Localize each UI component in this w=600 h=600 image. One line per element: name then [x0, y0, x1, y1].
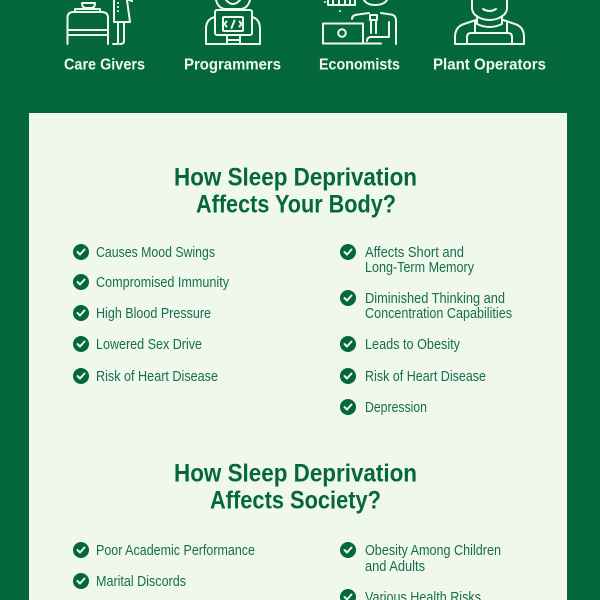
list: body effects, left column: Risk of Heart Disease — [96, 369, 218, 385]
list: body effects, left column — [73, 244, 230, 385]
list: body effects, left column: High Blood Pressure — [96, 306, 211, 322]
list: society effects, left column: Poor Academic Performance — [96, 543, 255, 559]
list: society effects, left column — [73, 542, 255, 590]
list: body effects, left column: Lowered Sex Drive — [96, 337, 202, 353]
section: at-risk professions — [64, 0, 546, 74]
icon: plant operator in overalls — [455, 0, 524, 44]
label: Programmers: Programmers — [184, 56, 281, 74]
heading: affects your body: How Sleep Deprivation — [174, 164, 417, 192]
list: body effects, right column: Long-Term Memory — [365, 260, 475, 276]
panel: sleep deprivation effects — [29, 113, 567, 600]
list: body effects, right column — [340, 244, 512, 416]
list: body effects, right column: Depression — [365, 400, 427, 416]
icon: economist with laptop — [323, 0, 396, 44]
heading: affects your body — [174, 164, 417, 218]
list: body effects, right column: Concentration Capabilities — [365, 306, 512, 322]
list: body effects, right column: Risk of Heart Disease — [365, 369, 486, 385]
heading: affects society — [174, 460, 417, 514]
heading: affects society: Affects Society? — [210, 486, 381, 514]
list: body effects, right column: Leads to Obesity — [365, 337, 461, 353]
heading: affects society: How Sleep Deprivation — [174, 460, 417, 488]
icon: programmer at monitor — [206, 0, 260, 44]
label: Care Givers: Care Givers — [64, 56, 145, 74]
icon: care giver with bed — [68, 0, 132, 44]
list: society effects, left column: Marital Discords — [96, 574, 186, 590]
label: Plant Operators: Plant Operators — [433, 56, 546, 74]
list: body effects, left column: Causes Mood Swings — [96, 245, 215, 261]
list: society effects, right column: Obesity Among Children — [365, 543, 501, 559]
list: society effects, right column: and Adults — [365, 559, 425, 575]
heading: affects your body: Affects Your Body? — [196, 190, 396, 218]
list: body effects, right column: Affects Short and — [365, 245, 464, 261]
list: body effects, right column: Diminished Thinking and — [365, 291, 505, 307]
label: Economists: Economists — [319, 56, 400, 74]
list: body effects, left column: Compromised Immunity — [96, 275, 230, 291]
list: society effects, right column — [340, 542, 501, 600]
